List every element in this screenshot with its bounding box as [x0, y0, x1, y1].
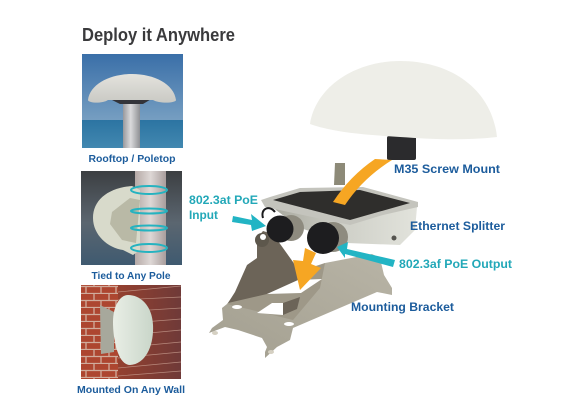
label: 802.3at PoE input: Input	[189, 210, 218, 222]
arrow: teal to PoE input	[232, 214, 266, 231]
label: M35 screw mount: M35 Screw Mount	[394, 164, 500, 176]
label: tied to any pole: Tied to Any Pole	[92, 270, 171, 282]
title: Deploy it Anywhere	[82, 25, 235, 45]
product: ethernet splitter box	[255, 163, 418, 254]
label: mounting bracket: Mounting Bracket	[351, 302, 454, 314]
photo: mounted on any wall	[81, 285, 181, 379]
photo: rooftop / poletop	[82, 54, 183, 148]
arrow: teal to PoE output	[337, 242, 395, 267]
arrow: orange to screw mount	[333, 159, 392, 205]
label: mounted on any wall: Mounted On Any Wall	[77, 384, 185, 396]
product: mounting bracket	[209, 231, 392, 358]
label: rooftop / poletop: Rooftop / Poletop	[88, 153, 176, 165]
photo: tied to any pole	[81, 171, 182, 265]
label: 802.3at PoE input: 802.3at PoE	[189, 195, 258, 207]
product: dome antenna	[310, 61, 497, 160]
label: 802.3at PoE input	[189, 195, 258, 222]
arrow: orange to bracket	[293, 248, 321, 290]
label: ethernet splitter: Ethernet Splitter	[410, 221, 506, 233]
label: 802.3af PoE output: 802.3af PoE Output	[399, 259, 512, 271]
